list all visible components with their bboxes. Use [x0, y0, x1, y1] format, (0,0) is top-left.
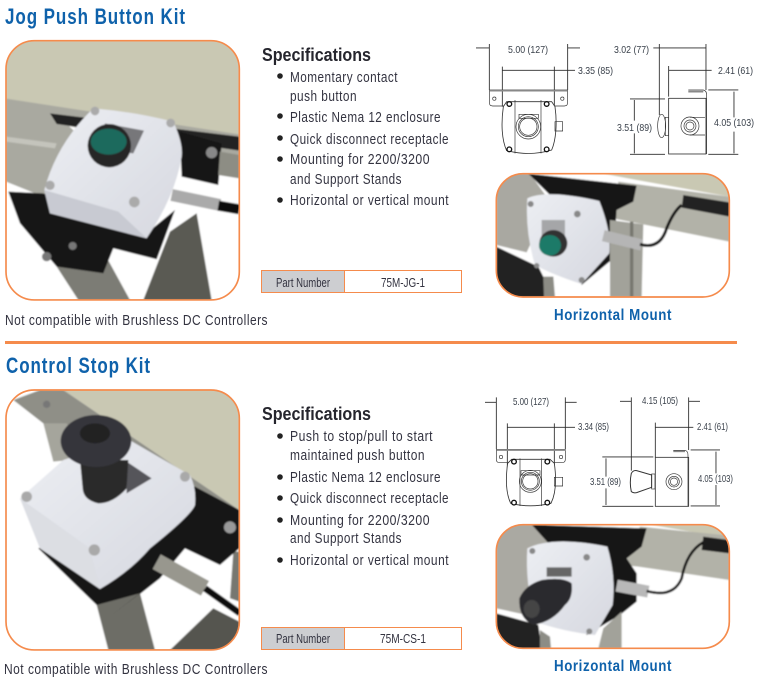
bullet list [277, 69, 449, 209]
bullet list: Horizontal or vertical mount [290, 552, 449, 569]
dimension drawing: control stop kit: 2.41 (61) [697, 421, 728, 433]
bullet list: and Support Stands [290, 530, 402, 547]
specifications heading: Specifications [262, 45, 371, 65]
section divider [5, 341, 737, 344]
dimension drawing: jog kit: 3.02 (77) [614, 44, 649, 56]
bullet list: Plastic Nema 12 enclosure [290, 469, 441, 486]
bullet list [277, 428, 449, 569]
bullet list: Quick disconnect receptacle [290, 131, 449, 148]
dimension drawing: control stop kit: 3.34 (85) [578, 421, 609, 433]
dimension drawing: jog kit: 2.41 (61) [718, 65, 753, 77]
part number table: jog kit: 75M-JG-1 [381, 276, 425, 290]
part number table: jog kit [262, 270, 462, 293]
bullet list: Horizontal or vertical mount [290, 192, 449, 209]
bullet list: Momentary contact [290, 69, 398, 86]
note: brushless compatibility, jog kit: Not compatible with Brushless DC Controllers [5, 312, 268, 329]
dimension drawing: control stop kit [485, 395, 733, 506]
dimension drawing: control stop kit: 4.15 (105) [642, 395, 678, 407]
bullet list: maintained push button [290, 447, 425, 464]
bullet list: Plastic Nema 12 enclosure [290, 109, 441, 126]
heading: Jog Push Button Kit: Jog Push Button Kit [5, 4, 186, 29]
caption: horizontal mount, control stop kit: Horizontal Mount [554, 658, 672, 675]
dimension drawing: jog kit [476, 44, 754, 154]
dimension drawing: jog kit: 5.00 (127) [508, 44, 548, 56]
photo: control stop kit [6, 390, 240, 650]
dimension drawing: control stop kit: 4.05 (103) [698, 473, 733, 485]
caption: horizontal mount, jog kit: Horizontal Mount [554, 307, 672, 324]
dimension drawing: control stop kit: 5.00 (127) [513, 396, 549, 408]
specifications heading: Specifications [262, 404, 371, 424]
specifications: jog kit [262, 45, 449, 209]
bullet list: push button [290, 88, 357, 105]
specifications: control stop kit [262, 404, 449, 569]
bullet list: and Support Stands [290, 171, 402, 188]
photo: jog push button kit [6, 41, 239, 300]
part number table: control stop kit: 75M-CS-1 [380, 632, 426, 646]
photo: jog kit horizontal mount [496, 174, 729, 297]
bullet list: Quick disconnect receptacle [290, 490, 449, 507]
part number table: jog kit: Part Number [276, 276, 330, 290]
dimension drawing: jog kit: 3.51 (89) [617, 122, 652, 134]
bullet list: Mounting for 2200/3200 [290, 151, 430, 168]
bullet list: Mounting for 2200/3200 [290, 512, 430, 529]
part number table: control stop kit [262, 627, 462, 650]
dimension drawing: jog kit: 3.35 (85) [578, 65, 613, 77]
heading: Control Stop Kit: Control Stop Kit [6, 353, 151, 378]
photo: control stop kit horizontal mount [496, 525, 729, 648]
note: brushless compatibility, control stop kit: Not compatible with Brushless DC Controllers [4, 661, 268, 678]
dimension drawing: control stop kit: 3.51 (89) [590, 476, 621, 488]
part number table: control stop kit: Part Number [276, 632, 330, 646]
bullet list: Push to stop/pull to start [290, 428, 433, 445]
